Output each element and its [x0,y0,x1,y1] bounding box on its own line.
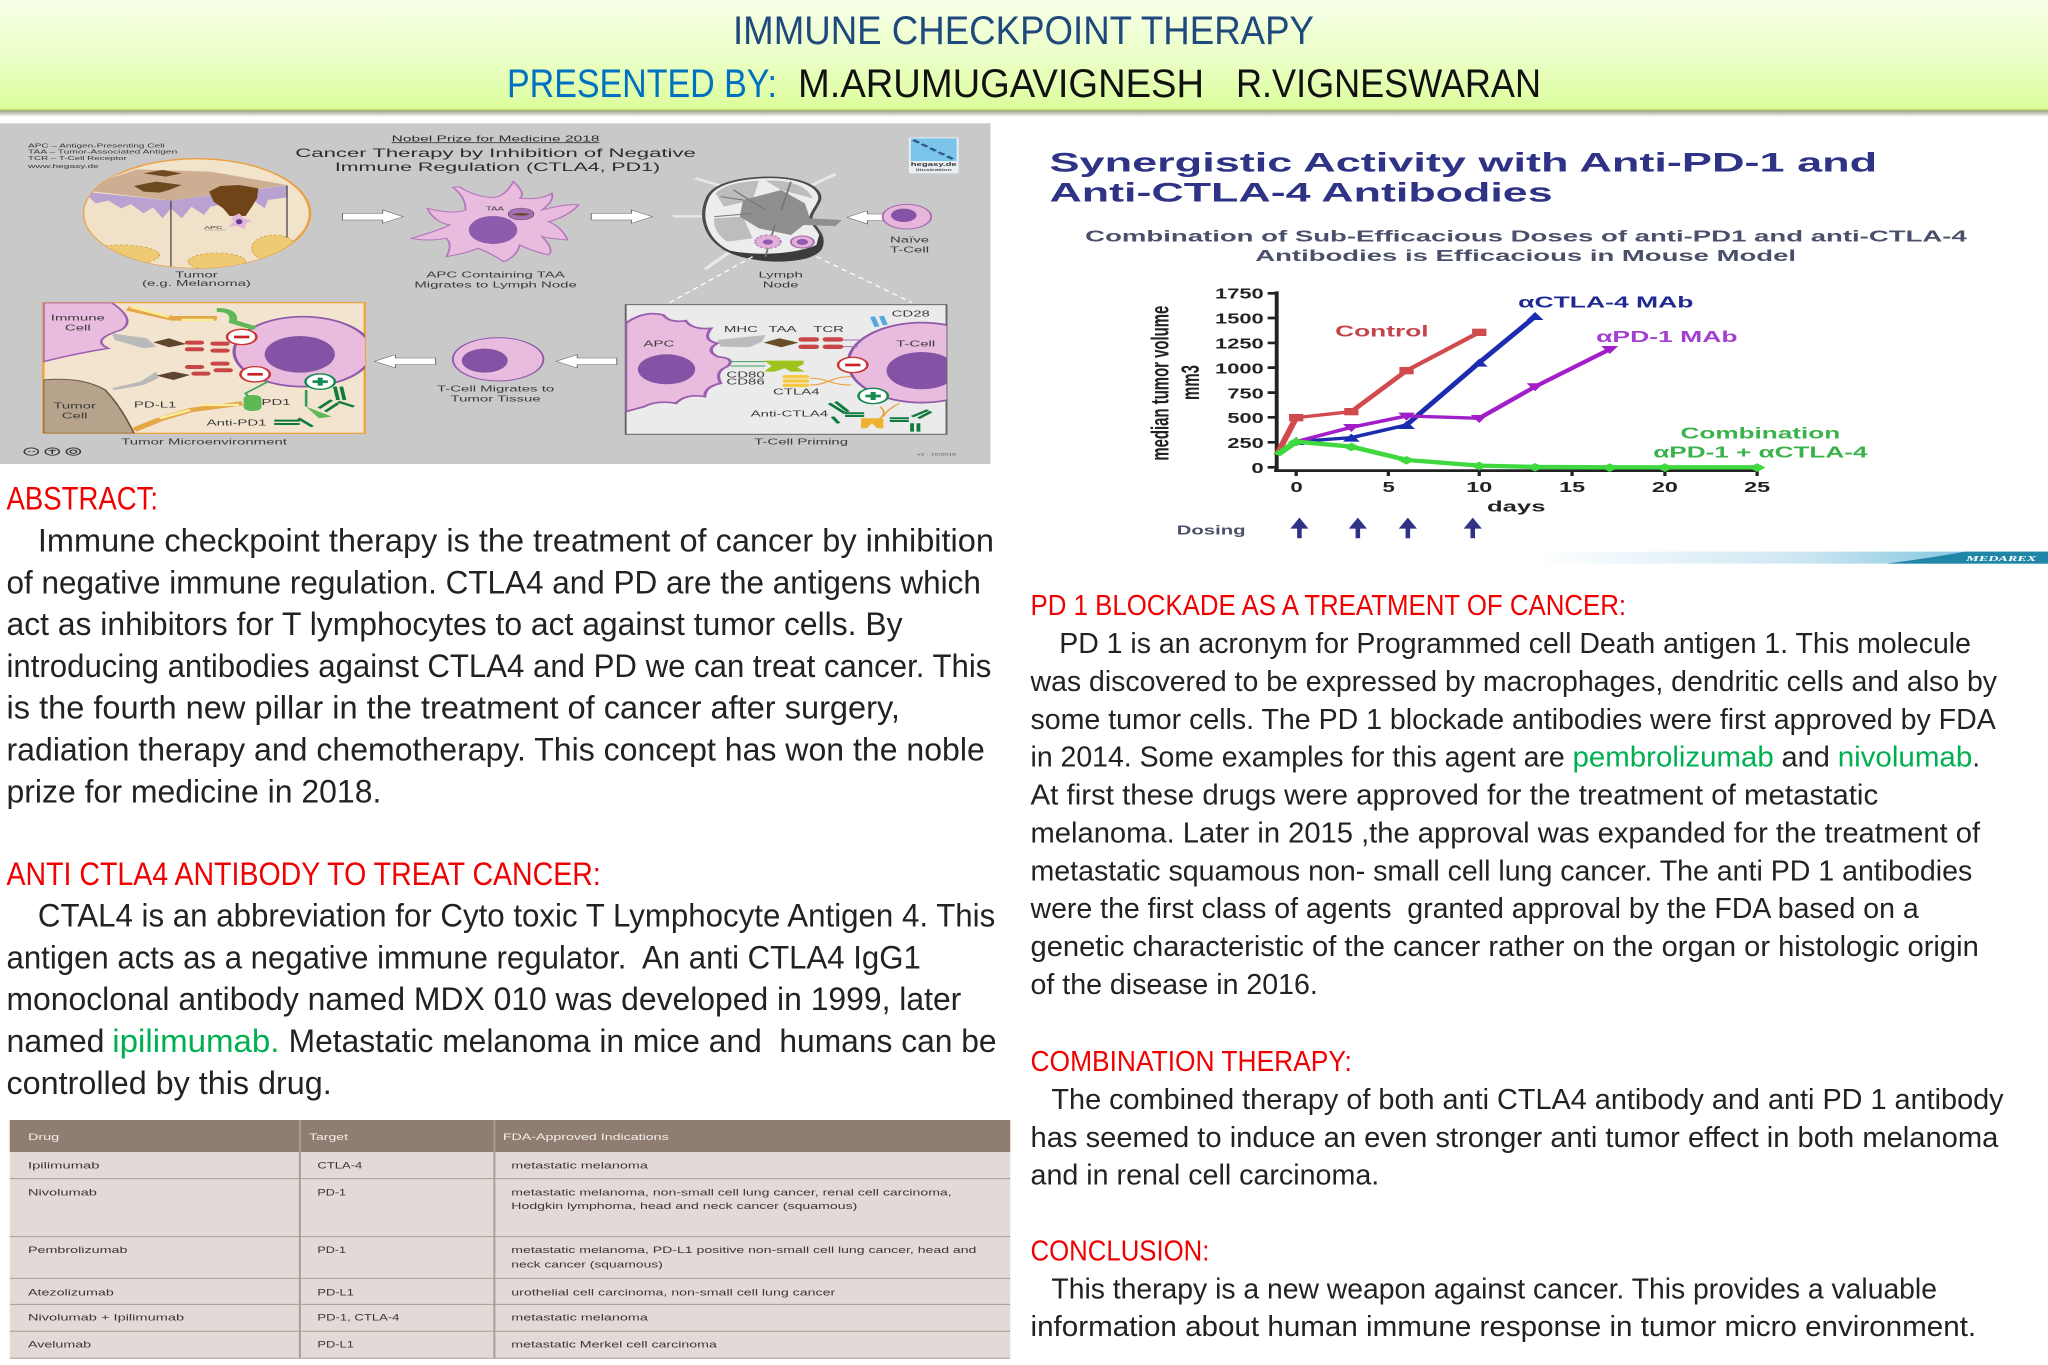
label: APC containing TAA: APC Containing TAA [426,270,565,279]
table rows: PD-1 [317,1187,346,1197]
panel: T-cell priming: T-Cell [896,339,935,349]
table rows: Nivolumab + Ipilimumab [28,1312,184,1323]
text: abstract body: radiation therapy and chemotherapy. This concept has won the noble [7,731,985,767]
text: abstract body: Immune checkpoint therapy is the treatment of cancer by inhibition [38,522,994,558]
table rows: Ipilimumab [28,1160,100,1170]
label: tumor: Tumor [175,270,218,279]
label: lymph node: Lymph [758,270,803,279]
series labels: αPD-1 MAb [1596,329,1738,346]
table rows: PD-1, CTLA-4 [317,1312,400,1323]
label: lymph node: Node [763,280,799,289]
figure title: Cancer Therapy by Inhibition of Negative [295,147,696,160]
figure title [295,134,696,174]
chart subtitle: Antibodies is Efficacious in Mouse Model [1255,248,1796,265]
text: abstract body: prize for medicine in 2018. [7,773,381,809]
table header: Target [309,1132,348,1142]
y axis title: mm3 [1177,365,1205,400]
table rows: metastatic melanoma [511,1312,648,1323]
conclusion section [1031,1235,1976,1343]
text: abstract body: act as inhibitors for T lymphocytes to act against tumor cells. By [7,606,903,642]
label: tumor: (e.g. Melanoma) [142,279,251,288]
chart title [1049,148,1877,207]
panel: T-cell priming: CD80 [726,370,765,379]
table rows: Pembrolizumab [28,1245,128,1255]
text: anti CTLA4 body [7,898,997,1101]
panel: tumor microenvironment: Immune [51,313,105,322]
panel: T-cell priming: Anti-CTLA4 [751,409,828,418]
table rows: metastatic Merkel cell carcinoma [511,1339,717,1349]
y axis title [1147,306,1205,461]
icon: hegasy logo: Illustration [916,168,952,172]
label: naive T-cell: Naïve [890,235,929,245]
figure: synergistic activity chart [1049,148,2048,564]
label: T-cell migrates: Tumor Tissue [451,394,541,404]
line chart [1215,285,1770,495]
panel: tumor microenvironment [43,303,372,433]
panel: T-cell priming: APC [644,339,675,349]
series labels: Combination [1680,426,1840,443]
heading: conclusion: CONCLUSION: [1031,1235,1209,1267]
footer band: medarex [1536,552,2048,564]
panel: tumor microenvironment: Cell [62,411,88,420]
text: abstract body: of negative immune regulation. CTLA4 and PD are the antigens which [7,564,981,600]
table rows [28,1160,976,1349]
text: abstract body: is the fourth new pillar in the treatment of cancer after surgery, [7,690,900,726]
series labels: αPD-1 + αCTLA-4 [1653,444,1868,461]
illustration: antigen presenting cell [411,182,578,262]
line chart: 750 [1227,385,1264,402]
text: PD1 body: in 2014. Some examples for this agent are [1031,742,1565,774]
label: lymph node [758,270,803,289]
x axis title: days [1487,498,1545,515]
text: PD1 body: genetic characteristic of the cancer rather on the organ or histologic origin [1031,931,1979,963]
text: PD1 body: At first these drugs were approved for the treatment of metastatic [1031,780,1878,812]
dosing arrows: Dosing [1177,523,1246,538]
illustration: lymph node [673,174,842,269]
illustration: migrating T-cell [453,338,543,381]
label: tumor [142,270,251,288]
text: combination body [1031,1084,2004,1192]
panel: T-cell priming: TAA [769,325,797,334]
table rows: Avelumab [28,1339,91,1349]
text: anti CTLA4 body: antigen acts as a negative immune regulator. An anti CTLA4 IgG1 [7,939,921,975]
figure title: Immune Regulation (CTLA4, PD1) [335,161,660,174]
text: combination body: The combined therapy of both anti CTLA4 antibody and anti PD 1 antibody [1051,1084,2004,1116]
table rows: PD-L1 [317,1287,354,1297]
panel: T-cell priming: TCR [813,325,844,334]
text: PD1 body: some tumor cells. The PD 1 blockade antibodies were first approved by FDA [1031,704,1997,736]
panel: T-cell priming: CD86 [726,377,765,387]
line chart: 0 [1290,478,1303,495]
legend abbreviations: www.hegasy.de [27,163,100,169]
text: PD1 body: was discovered to be expressed by macrophages, dendritic cells and also by [1030,666,1998,698]
panel: tumor microenvironment: PD1 [261,398,291,407]
series labels: Control [1335,324,1429,341]
line chart: 10 [1466,478,1492,495]
arrow: APC to lymph node [591,210,652,223]
y axis title: median tumor volume [1147,306,1175,461]
table header: Drug [28,1132,59,1142]
presenters [507,62,1541,106]
text: abstract body [7,522,994,809]
legend abbreviations: APC – Antigen-Presenting Cell [28,143,165,149]
table rows: CTLA-4 [317,1160,363,1170]
text: PD1 body: of the disease in 2016. [1031,969,1318,1001]
line chart: 1250 [1215,335,1264,352]
heading: anti CTLA4: ANTI CTLA4 ANTIBODY TO TREAT CANCER: [7,856,601,892]
table rows: PD-L1 [317,1339,354,1349]
text: PD1 body: melanoma. Later in 2015 ,the approval was expanded for the treatment of [1031,817,1981,849]
panel: tumor microenvironment: Cell [65,323,91,332]
text: PD1 body: PD 1 is an acronym for Programmed cell Death antigen 1. This molecule [1059,628,1971,660]
figure: cancer therapy by inhibition of negative immune regulation [0,123,995,464]
text: PD1 body: metastatic squamous non- small cell lung cancer. The anti PD 1 antibodies [1031,855,1972,887]
figure title: Nobel Prize for Medicine 2018 [392,134,600,144]
arrow: T-cell to tumor [374,355,436,368]
panel: T-cell priming: MHC [724,325,758,334]
series: anti-PD-1 [1277,346,1618,455]
line chart: 5 [1383,478,1395,495]
text: anti CTLA4 body: ipilimumab. [112,1023,280,1059]
icon: hegasy logo [909,137,959,173]
line chart: 500 [1227,409,1264,426]
text: PD1 body: . [1972,742,1980,774]
version note: v2 - 10/2018 [917,453,956,457]
table rows: urothelial cell carcinoma, non-small cell lung cancer [511,1287,836,1297]
legend abbreviations [27,143,177,169]
table rows: metastatic melanoma [511,1160,648,1170]
label: T-cell priming: T-Cell Priming [754,437,848,447]
series: combination [1277,438,1766,472]
line chart: 250 [1227,434,1264,451]
table: FDA approved drugs [10,1120,1010,1358]
series: control [1277,329,1486,455]
label: naive T-cell: T-Cell [890,245,929,255]
text: PD1 body: nivolumab [1838,742,1972,774]
label: tumor microenvironment: Tumor Microenvironment [121,437,288,447]
arrow: tumor to APC [342,210,403,223]
chart title: Synergistic Activity with Anti-PD-1 and [1049,148,1877,177]
header banner [0,0,2048,117]
text: anti CTLA4 body: monoclonal antibody named MDX 010 was developed in 1999, later [7,981,962,1017]
text: conclusion body: This therapy is a new weapon against cancer. This provides a valuable [1051,1273,1937,1305]
presenters: M.ARUMUGAVIGNESH [798,62,1204,106]
text: anti CTLA4 body: Metastatic melanoma in mice and humans can be [289,1023,997,1059]
text: combination body: and in renal cell carcinoma. [1031,1160,1379,1192]
dosing arrows [1177,518,1482,538]
table rows: Hodgkin lymphoma, head and neck cancer (squamous) [511,1201,857,1211]
text: PD1 body [1030,628,1998,1001]
PD1 blockade section [1030,590,1998,1001]
abstract section [7,481,994,809]
legend abbreviations: TAA – Tumor-Associated Antigen [28,149,177,155]
table rows: neck cancer (squamous) [511,1259,663,1269]
icons: creative commons [24,448,80,455]
label: APC containing TAA [414,270,577,289]
text: PD1 body: were the first class of agents granted approval by the FDA based on a [1030,893,1919,925]
chart title: Anti-CTLA-4 Antibodies [1049,178,1553,207]
line chart: 1500 [1215,310,1264,327]
label: naive T-cell [890,235,929,255]
text: PD1 body: pembrolizumab [1573,742,1774,774]
heading: combination therapy: COMBINATION THERAPY: [1031,1046,1352,1078]
presenters: PRESENTED BY: [507,62,777,106]
panel: tumor microenvironment: Tumor [53,401,96,410]
table rows: metastatic melanoma, PD-L1 positive non-small cell lung cancer, head and [511,1245,976,1255]
arrow: priming to migration [556,355,617,368]
title: IMMUNE CHECKPOINT THERAPY [733,9,1314,53]
line chart: 25 [1744,478,1770,495]
icon: hegasy logo: hegasy.de [911,161,957,167]
table rows: Atezolizumab [28,1287,114,1297]
chart subtitle [1085,229,1968,265]
panel: tumor microenvironment: Anti-PD1 [207,418,267,428]
text: anti CTLA4 body: named [7,1023,104,1059]
line chart: 1000 [1215,360,1264,377]
text: conclusion body [1031,1273,1976,1343]
label: T-cell migrates [437,384,555,404]
arrow: naive T-cell to lymph node [847,211,883,224]
text: anti CTLA4 body: controlled by this drug. [7,1065,332,1101]
label: APC containing TAA: Migrates to Lymph Node [414,280,577,289]
legend abbreviations: TCR – T-Cell Receptor [28,155,127,161]
text: combination body: has seemed to induce an even stronger anti tumor effect in both melanoma [1031,1122,1998,1154]
table rows: Nivolumab [28,1187,97,1197]
line chart: 1750 [1215,285,1264,302]
panel: T-cell priming: CTLA4 [773,387,820,397]
line chart: 0 [1251,459,1264,476]
line chart: 20 [1652,478,1678,495]
panel: T-cell priming [624,304,948,435]
text: conclusion body: information about human immune response in tumor micro environment. [1031,1311,1976,1343]
chart subtitle: Combination of Sub-Efficacious Doses of anti-PD1 and anti-CTLA-4 [1085,229,1968,246]
series labels: αCTLA-4 MAb [1518,295,1693,312]
presenters: R.VIGNESWARAN [1236,62,1541,106]
heading: abstract: ABSTRACT: [7,481,158,517]
table header [10,1120,1010,1152]
table rows: PD-1 [317,1245,346,1255]
text: abstract body: introducing antibodies against CTLA4 and PD we can treat cancer. This [7,648,991,684]
label: T-cell migrates: T-Cell Migrates to [437,384,555,394]
table rows: metastatic melanoma, non-small cell lung cancer, renal cell carcinoma, [511,1187,952,1197]
illustration: antigen presenting cell: TAA [486,206,505,212]
heading: PD1 blockade: PD 1 BLOCKADE AS A TREATMENT OF CANCER: [1031,590,1626,622]
footer band: medarex: MEDAREX [1965,555,2037,563]
text: anti CTLA4 body: CTAL4 is an abbreviation for Cyto toxic T Lymphocyte Antigen 4. This [38,898,995,934]
panel: tumor microenvironment: PD-L1 [134,400,177,409]
anti CTLA4 section [7,856,997,1101]
dashed zoom lines [670,257,912,303]
illustration: naive T-cell [883,204,931,229]
combination therapy section [1031,1046,2004,1192]
text: PD1 body: and [1782,742,1830,774]
table header: FDA-Approved Indications [503,1132,669,1142]
panel: T-cell priming: CD28 [892,309,930,319]
line chart: 15 [1559,478,1585,495]
series: anti-CTLA-4 [1277,312,1544,455]
series labels [1335,295,1868,461]
illustration: tumor skin block: APC [204,225,222,230]
illustration: tumor skin block [77,159,310,270]
